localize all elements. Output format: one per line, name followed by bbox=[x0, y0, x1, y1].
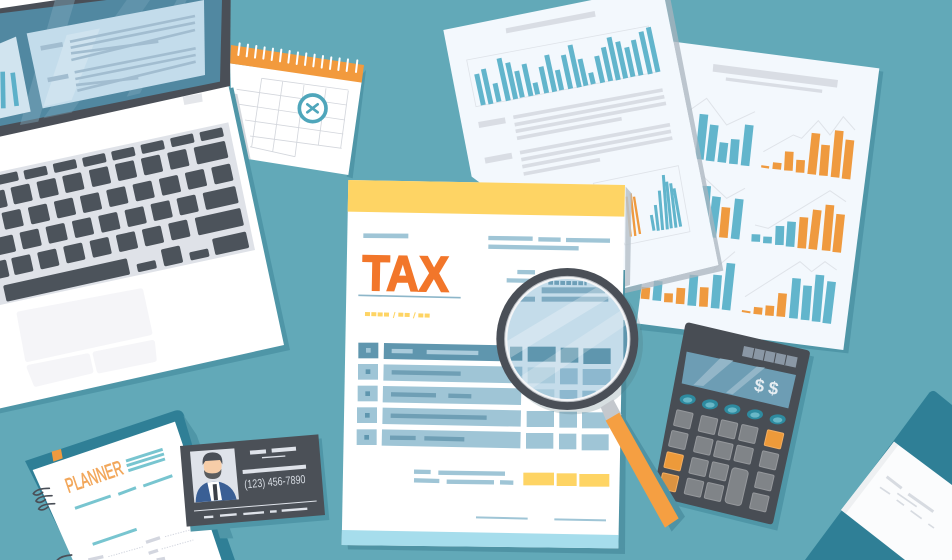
lens ring bbox=[496, 268, 638, 410]
tax form bbox=[342, 180, 632, 554]
yellow header bbox=[348, 180, 625, 217]
laptop bbox=[0, 0, 290, 413]
keyboard bbox=[0, 122, 255, 305]
lens contents bbox=[507, 279, 628, 399]
calculator bbox=[653, 323, 814, 531]
planner rings bbox=[33, 488, 72, 560]
phone number: (123) 456-7890 bbox=[244, 473, 306, 491]
keypad bbox=[659, 410, 784, 512]
table bbox=[357, 343, 609, 450]
planner bbox=[25, 410, 237, 560]
date placeholder bbox=[365, 312, 430, 318]
pale blue footer bbox=[342, 530, 619, 548]
bars: middle-right chart bbox=[756, 205, 841, 252]
bars: bottom-right chart bbox=[746, 275, 832, 323]
form sheet bbox=[342, 180, 625, 548]
display: $ bbox=[767, 378, 780, 399]
screen frame bbox=[0, 0, 231, 137]
screen window: document bbox=[27, 0, 205, 108]
text lines bbox=[479, 90, 672, 174]
folder: bottom right bbox=[805, 391, 952, 560]
paper: left report with text and charts bbox=[443, 0, 723, 293]
handle bbox=[601, 399, 679, 528]
portrait bbox=[190, 448, 239, 503]
bar chart: lower bbox=[593, 166, 690, 245]
bars: bottom-left chart bbox=[645, 263, 731, 310]
function buttons bbox=[680, 394, 786, 424]
calendar bbox=[230, 43, 366, 178]
magnifying glass bbox=[496, 268, 685, 532]
business card bbox=[180, 434, 329, 532]
bookmark tab bbox=[52, 449, 63, 462]
card text lines bbox=[194, 449, 317, 517]
screen display bbox=[0, 0, 222, 126]
form text lines bbox=[358, 236, 610, 298]
laptop base bbox=[0, 85, 284, 408]
planner title: PLANNER bbox=[62, 457, 126, 498]
solar panel bbox=[742, 346, 798, 368]
bar chart: upper bbox=[477, 27, 658, 105]
bars: middle-left chart bbox=[703, 186, 739, 239]
display: $ bbox=[753, 375, 766, 396]
title: TAX: TAX bbox=[362, 245, 449, 303]
bars: top-right chart bbox=[765, 131, 850, 179]
display bbox=[682, 352, 796, 408]
planner page bbox=[33, 422, 223, 560]
stray shadow on the report bbox=[625, 187, 632, 287]
bars: top-left chart bbox=[699, 114, 749, 166]
totals bbox=[414, 472, 609, 487]
icon: circled x date bbox=[299, 95, 326, 122]
touchpad bbox=[19, 291, 154, 384]
signature lines bbox=[476, 517, 606, 520]
screen window: chart bbox=[0, 37, 31, 118]
paper: right report with bar charts bbox=[637, 42, 883, 353]
